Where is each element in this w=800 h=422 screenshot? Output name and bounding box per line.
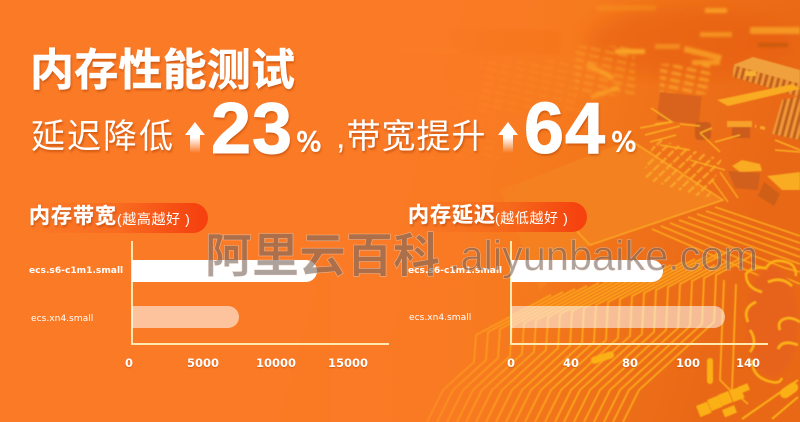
label: xn4: ecs.xn4.small bbox=[409, 313, 471, 323]
chip plane bbox=[500, 140, 723, 290]
watermark: chinese: 阿里云百科 bbox=[205, 229, 440, 282]
tick labels: 0 bbox=[507, 356, 515, 370]
panel: memory latency chart: 40 bbox=[563, 356, 579, 370]
panel: memory bandwidth chart: 10000 bbox=[256, 356, 296, 370]
percent sign: % bbox=[296, 127, 322, 158]
label: s6: ecs.s6-c1m1.small bbox=[29, 266, 123, 276]
upper board details bbox=[400, 5, 800, 160]
heading: 内存带宽 bbox=[29, 205, 117, 228]
label: s6: ecs.s6-c1m1.small bbox=[408, 266, 502, 276]
bar: s6 bbox=[511, 260, 663, 282]
heading note: (越高越好 ) bbox=[117, 211, 190, 227]
traces family bbox=[427, 207, 800, 422]
bar: xn4 bbox=[132, 306, 239, 328]
chip field bbox=[640, 57, 800, 206]
panel: memory latency chart: 80 bbox=[622, 356, 638, 370]
panel: memory latency chart bbox=[408, 202, 768, 370]
heading: 内存延迟 bbox=[408, 204, 496, 227]
title: 内存性能测试 bbox=[30, 46, 295, 95]
panel: memory bandwidth chart: 15000 bbox=[328, 356, 368, 370]
bar: s6 bbox=[132, 260, 317, 282]
heading note: (越低越好 ) bbox=[495, 210, 568, 226]
x axis bbox=[510, 343, 768, 344]
panel: memory latency chart: 140 bbox=[736, 356, 760, 370]
heading pill bbox=[28, 203, 208, 233]
percent sign: % bbox=[611, 127, 637, 158]
y axis bbox=[510, 241, 512, 345]
watermark: domain: .aliyunbaike.com bbox=[449, 232, 758, 279]
tick labels: 0 bbox=[125, 356, 133, 370]
panel: memory latency chart: 100 bbox=[676, 356, 700, 370]
panel: memory bandwidth chart: 5000 bbox=[187, 356, 219, 370]
bandwidth label: ,带宽提升 bbox=[336, 118, 486, 156]
watermark bbox=[205, 229, 758, 282]
headline: latency and bandwidth bbox=[31, 89, 637, 169]
label: xn4: ecs.xn4.small bbox=[31, 314, 93, 324]
x axis bbox=[131, 343, 389, 344]
y axis bbox=[131, 241, 132, 345]
panel: memory bandwidth chart bbox=[29, 203, 389, 370]
heading pill bbox=[408, 202, 587, 232]
chip pads bbox=[590, 261, 800, 419]
icon: up arrow bbox=[185, 122, 205, 152]
icon: up arrow bbox=[498, 122, 518, 152]
latency label: 延迟降低 bbox=[31, 118, 175, 156]
bar: xn4 bbox=[511, 306, 725, 328]
bandwidth value: 64 bbox=[524, 89, 606, 169]
right descending traces bbox=[652, 207, 800, 300]
latency value: 23 bbox=[211, 89, 293, 169]
